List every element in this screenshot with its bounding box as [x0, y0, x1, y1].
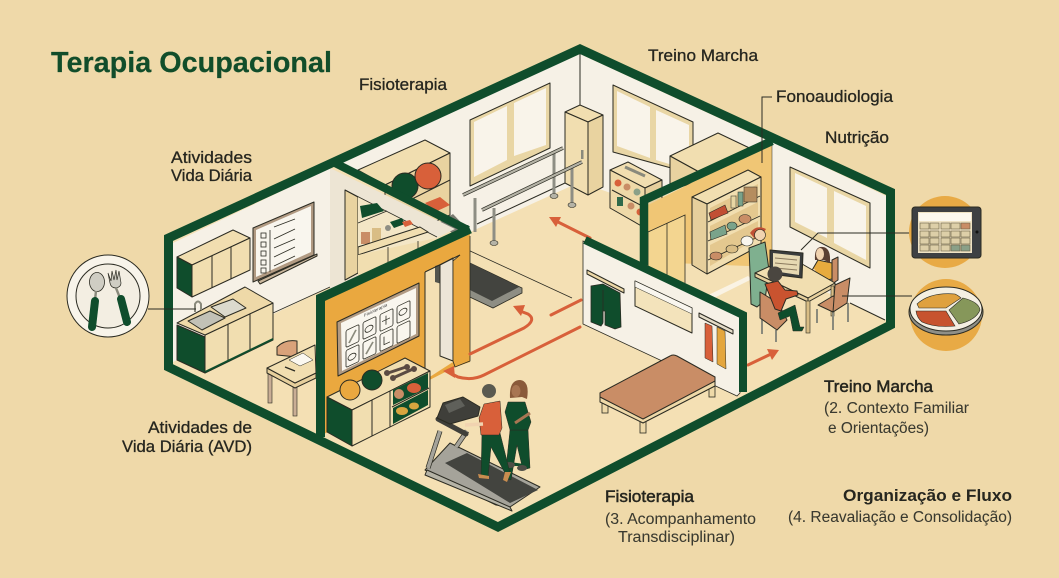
right room window — [790, 167, 870, 268]
text block: Fisioterapia, step 3: Transdisciplinar) — [618, 529, 735, 546]
icon: dumbbells — [384, 364, 416, 380]
arrow: door loop — [470, 305, 532, 354]
label: Atividades Vida Diária: Vida Diária — [171, 167, 253, 185]
chart board: pictogram panel on orange wall — [337, 283, 419, 376]
text block: Fisioterapia, step 3 — [605, 488, 756, 546]
therapist — [505, 380, 531, 480]
arrow: to nutrition room — [748, 349, 779, 365]
treatment bed — [600, 355, 715, 433]
text block: Fisioterapia, step 3: (3. Acompanhamento — [605, 511, 756, 528]
icon: green ball — [392, 173, 418, 199]
panel: main room back walls — [335, 54, 775, 232]
icon: green ball — [362, 370, 382, 390]
treadmill — [425, 397, 540, 511]
icon: coral ball — [415, 163, 441, 189]
meal portion: red — [916, 311, 955, 326]
hook bar — [587, 270, 624, 293]
arrow: short segment — [551, 300, 581, 315]
whiteboard checklist — [253, 202, 317, 284]
label: Atividades Vida Diária: Atividades — [171, 149, 252, 167]
rear treadmill — [435, 214, 522, 308]
arrow: long return — [443, 327, 580, 379]
meal portion: green — [949, 298, 980, 324]
right wardrobe — [670, 133, 760, 190]
patient — [465, 384, 511, 482]
callout: plate and cutlery — [67, 255, 196, 337]
nutritionist — [741, 227, 769, 307]
text block: Treino Marcha, step 2: e Orientações) — [828, 420, 929, 437]
main room left shelf with balls — [358, 140, 450, 228]
folded mat — [425, 197, 450, 212]
label: Atividades de Vida Diária (AVD): Vida Diária (AVD) — [122, 438, 252, 456]
callout: communication tablet — [801, 196, 981, 268]
corner cabinet — [565, 105, 603, 195]
title: Terapia Ocupacional — [51, 47, 332, 79]
icon: yellow ball — [340, 380, 360, 400]
meal portion: orange — [917, 294, 961, 308]
text block: Organização e Fluxo, step 4: (4. Reavaliação e Consolidação) — [788, 509, 1012, 526]
icon: main room right window — [613, 85, 693, 174]
partition wall: shelf recess — [330, 168, 455, 290]
right chair — [817, 278, 850, 330]
text block: Organização e Fluxo, step 4 — [788, 487, 1012, 526]
kitchen counter with sink — [177, 287, 273, 373]
upper cabinet — [177, 230, 250, 297]
label: Nutrição: Nutrição — [825, 129, 889, 147]
orange wall cabinet with balls and weights — [327, 358, 430, 446]
table — [755, 257, 835, 333]
panel: right room — [648, 142, 886, 378]
chair behind — [832, 257, 838, 284]
right room bookshelf — [692, 170, 761, 274]
icon: green vest — [591, 284, 621, 329]
label: Atividades de Vida Diária (AVD): Atividades de — [148, 419, 252, 437]
text block: Treino Marcha, step 2: Treino Marcha — [824, 378, 934, 396]
low shelf with objects — [610, 162, 662, 228]
label: Fisioterapia: Fisioterapia — [359, 76, 448, 94]
desk with chair — [267, 341, 316, 416]
chart board: pictogram panel on orange wall: Fisioterapia — [364, 302, 388, 319]
text block: Treino Marcha, step 2: (2. Contexto Familiar — [824, 400, 970, 417]
callout: divided meal plate — [842, 279, 983, 351]
icon: main room left window — [470, 83, 550, 186]
text block: Fisioterapia, step 3: Fisioterapia — [605, 488, 695, 506]
floor plan base — [168, 49, 890, 527]
woman in yellow — [802, 247, 832, 282]
towels rack — [699, 313, 733, 369]
parallel bars — [463, 148, 582, 246]
man seated — [760, 266, 804, 342]
building walls — [168, 49, 890, 527]
callout line: Fonoaudiologia — [762, 97, 772, 163]
panel: left room kitchen — [177, 202, 317, 416]
label: Fonoaudiologia: Fonoaudiologia — [776, 88, 894, 106]
tablet on table — [770, 250, 803, 278]
label: Treino Marcha: Treino Marcha — [648, 47, 759, 65]
arrow: to gait corridor — [549, 217, 590, 238]
text block: Organização e Fluxo, step 4: Organização e Fluxo — [843, 487, 1012, 505]
people at nutrition table — [741, 227, 850, 342]
panel: left room wall — [173, 168, 330, 362]
icon: fork — [108, 270, 127, 322]
main treadmill with patient and therapist — [425, 380, 540, 511]
flow arrows — [443, 217, 779, 379]
floor line — [468, 250, 572, 298]
wall panel — [635, 281, 692, 333]
icon: spoon — [90, 272, 104, 327]
text block: Treino Marcha, step 2 — [824, 378, 970, 437]
partition wall: changing area — [583, 241, 743, 396]
panel: orange wall with door — [322, 232, 470, 435]
